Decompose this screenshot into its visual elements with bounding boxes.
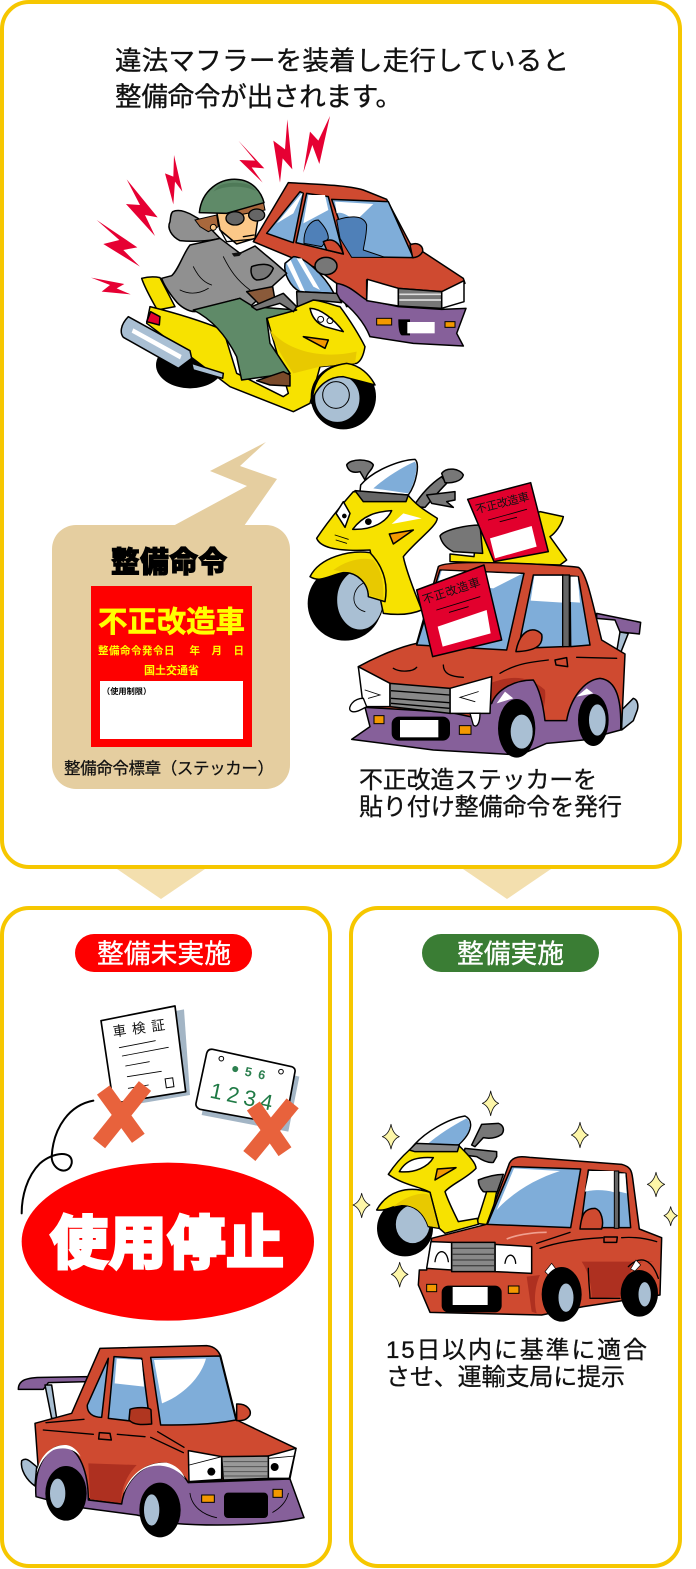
badge: not serviced: 整備未実施	[97, 939, 231, 969]
badge: not serviced	[75, 934, 252, 972]
spoiler	[18, 1377, 88, 1389]
sticker front: 不正改造車	[421, 575, 482, 607]
heading: intro text: 整備命令が出されます。	[115, 82, 402, 112]
cross marks	[99, 1086, 293, 1156]
text: requirement within 15 days: させ、運輸支局に提示	[386, 1364, 625, 1391]
sticker front	[417, 565, 502, 657]
scooter	[377, 1116, 503, 1256]
arrow: to not serviced	[117, 869, 205, 899]
illustration: vehicle inspection certificate and plate crossed out	[22, 1006, 314, 1321]
wheels	[45, 1466, 87, 1521]
red car	[253, 183, 466, 346]
windows	[151, 1356, 236, 1425]
rider	[162, 179, 297, 386]
certificate: 車検証	[112, 1017, 166, 1040]
mirrors	[237, 1404, 250, 1421]
badge: serviced	[422, 934, 599, 972]
scooter	[308, 459, 567, 641]
illustration: compliant car and scooter with sparkles	[353, 1091, 677, 1322]
sticker: 整備命令発令日 年 月 日	[98, 644, 244, 657]
license plate	[196, 1049, 299, 1132]
caption: sticker issued	[359, 767, 622, 821]
license plate: 1234	[208, 1078, 275, 1115]
panel: top notice	[2, 2, 680, 867]
badge: serviced: 整備実施	[457, 939, 564, 969]
sticker	[91, 586, 252, 747]
scooter rear wheel	[156, 342, 224, 388]
callout: sticker explanation	[52, 442, 290, 789]
text: requirement within 15 days: 15日以内に基準に適合	[386, 1337, 647, 1364]
red car body	[350, 563, 625, 758]
sticker: （使用制限）	[102, 686, 151, 696]
caption: sticker issued: 貼り付け整備命令を発行	[359, 794, 622, 821]
front face	[188, 1451, 222, 1482]
sticker: 不正改造車	[98, 606, 245, 639]
scooter front wheel	[311, 363, 376, 429]
license plate: 56	[244, 1065, 267, 1083]
heading: intro text: 違法マフラーを装着し走行していると	[115, 46, 569, 76]
sticker caption: 整備命令標章（ステッカー）	[64, 759, 274, 778]
illustration: car and scooter with stickers	[308, 459, 641, 758]
spoiler	[597, 613, 641, 730]
illustration: scooter rider and car with noise	[91, 116, 466, 429]
text: requirement within 15 days	[386, 1337, 647, 1391]
panel: not serviced	[2, 908, 330, 1566]
certificate	[101, 1006, 190, 1107]
caption: sticker issued: 不正改造ステッカーを	[359, 767, 597, 794]
panel: serviced	[351, 908, 680, 1566]
sparkles	[353, 1091, 677, 1287]
sticker: 国土交通省	[144, 663, 199, 677]
oval: suspension of use: 使用停止	[50, 1212, 284, 1276]
illustration: red car with spoiler	[18, 1346, 304, 1537]
sticker rear: 不正改造車	[474, 489, 531, 516]
sticker rear	[468, 483, 548, 562]
arrow: to serviced	[463, 869, 551, 899]
noise bolts	[91, 116, 330, 294]
scooter body	[121, 257, 365, 412]
callout heading: 整備命令	[111, 547, 227, 579]
curly line	[22, 1101, 93, 1213]
body	[35, 1346, 296, 1503]
car	[418, 1157, 662, 1322]
heading: intro text	[115, 46, 569, 112]
oval: suspension of use	[22, 1163, 314, 1321]
